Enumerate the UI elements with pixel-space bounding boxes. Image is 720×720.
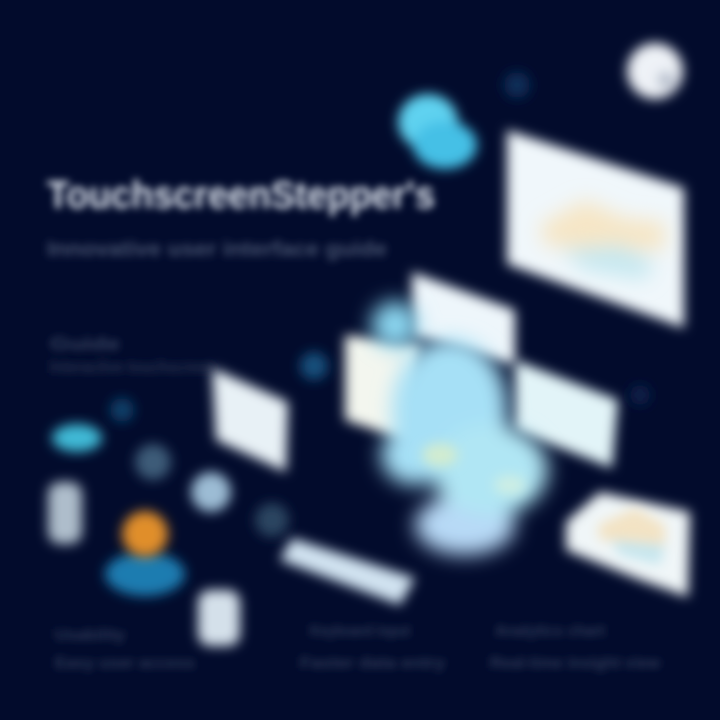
icon: grey dot xyxy=(135,444,171,480)
label: left heading xyxy=(50,334,215,377)
panel: right cluster sheet xyxy=(515,360,618,468)
panel: lower right chart window xyxy=(566,492,690,597)
icon: phone left xyxy=(48,482,82,544)
icon: small dot right xyxy=(630,385,650,405)
icon: small dot xyxy=(504,72,530,98)
label: bottom right xyxy=(490,623,661,672)
label: left heading: Interactive touchscreen xyxy=(50,357,215,377)
panel: large chart window xyxy=(507,130,684,328)
icon: cyan hub xyxy=(371,301,548,555)
icon: moon circle xyxy=(627,43,683,99)
subtitle: Innovative user interface guide xyxy=(47,238,387,261)
icon: central cluster xyxy=(345,272,618,555)
icon: dim dot xyxy=(255,503,289,537)
label: bottom left: Easy user access xyxy=(55,655,195,672)
title: TouchscreenStepper's xyxy=(47,174,435,217)
chart: top window lines xyxy=(540,200,665,280)
label: bottom right: Analytics chart xyxy=(495,623,606,640)
icon: link node xyxy=(110,398,134,422)
panel: left cluster sheet xyxy=(345,335,420,445)
icon: cloud xyxy=(398,94,477,169)
icon: phone bottom xyxy=(198,590,240,646)
icon: white dot xyxy=(191,472,231,512)
icon: hub highlights xyxy=(422,443,526,495)
panel: small window xyxy=(212,368,288,472)
label: bottom right: Real-time insight view xyxy=(490,655,661,672)
icon: keyboard xyxy=(280,538,415,605)
label: left heading: Guide xyxy=(50,334,120,354)
icon: small dot mid xyxy=(300,352,328,380)
label: bottom centre xyxy=(300,623,445,672)
label: bottom left xyxy=(55,627,195,672)
panel: top cluster sheet xyxy=(412,272,515,365)
label: bottom centre: Faster data entry xyxy=(300,655,445,672)
icon: person xyxy=(105,511,185,596)
label: bottom centre: Keyboard input xyxy=(310,623,411,640)
chart: lower window lines xyxy=(598,508,665,565)
icon: cyan cloud small xyxy=(52,424,102,452)
label: bottom left: Usability xyxy=(55,627,125,644)
